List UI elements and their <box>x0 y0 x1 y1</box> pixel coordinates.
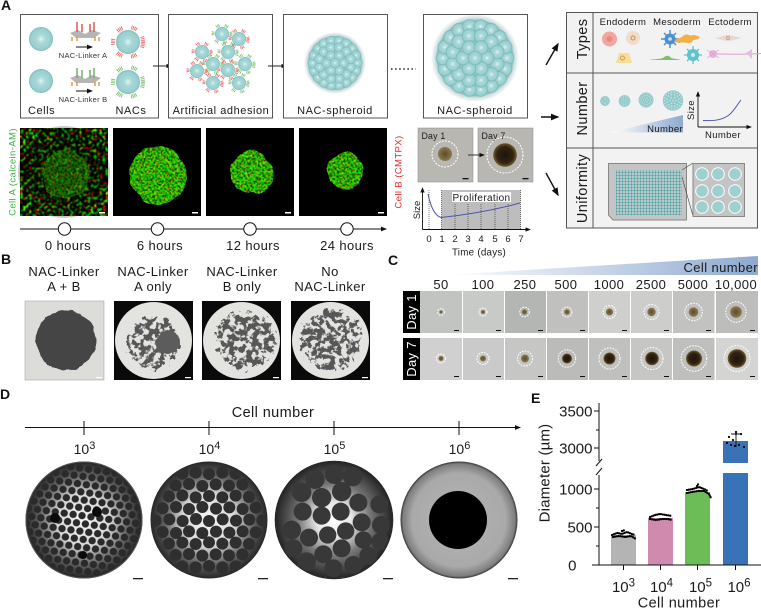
bars <box>611 441 748 565</box>
spheroid <box>304 32 366 94</box>
condition labels: NAC-Linker <box>117 264 189 279</box>
proliferation chart: 2 <box>452 234 458 245</box>
axis labels: 4 <box>214 440 220 452</box>
x tick labels: 10 <box>689 579 706 596</box>
arrow B <box>76 90 92 92</box>
NAC green <box>113 67 143 97</box>
icons mesoderm <box>649 30 702 64</box>
growing spheroids <box>600 90 683 111</box>
proliferation chart: 0 <box>426 234 432 245</box>
condition labels: A + B <box>47 279 81 294</box>
condition labels: NAC-Linker <box>294 279 366 294</box>
image B only <box>202 301 281 380</box>
fluorescence 24 hours <box>299 128 387 216</box>
box: artificial adhesion <box>168 14 272 118</box>
label NAC-Linker B: NAC-Linker B <box>59 95 107 104</box>
fluorescence 6 hours <box>113 128 201 216</box>
proliferation chart: Proliferation <box>453 193 510 204</box>
row tag Day 7: Day 7 <box>404 341 419 377</box>
axis labels: 10 <box>324 441 339 457</box>
column labels: 2500 <box>636 277 666 292</box>
y tick labels: 1000 <box>559 482 592 498</box>
column labels: 250 <box>514 277 536 292</box>
cell bottom <box>29 69 53 93</box>
column labels: 10,000 <box>715 277 757 292</box>
micrograph day 1: Day 1 <box>422 131 445 141</box>
headings germ layers <box>600 17 752 28</box>
fluorescence 12 hours <box>206 128 294 216</box>
label Cell B: Cell B (CMTPX) <box>394 135 404 209</box>
proliferation chart: 4 <box>478 234 484 245</box>
proliferation chart <box>412 188 530 258</box>
scale bar <box>258 578 268 579</box>
NAC-Linker B <box>70 68 101 86</box>
row label Number: Number <box>575 82 591 135</box>
arrow to Number <box>541 116 558 118</box>
fluorescence 0 hours <box>18 126 110 218</box>
column labels: 50 <box>433 277 449 292</box>
box: NAC-spheroid large <box>424 14 528 118</box>
arrow A <box>76 46 92 48</box>
scale bar <box>508 578 518 579</box>
y tick labels <box>559 404 592 574</box>
image no linker <box>291 301 370 380</box>
proliferation chart: 3 <box>465 234 471 245</box>
column labels: 100 <box>472 277 494 292</box>
micrograph grid <box>420 291 758 380</box>
x tick labels: 6 <box>744 578 751 590</box>
well 10^3 <box>25 461 143 579</box>
axis labels: 3 <box>89 440 95 452</box>
headings germ layers: Mesoderm <box>653 17 701 28</box>
label Cell A: Cell A (calcein-AM) <box>8 128 18 216</box>
data points <box>612 483 711 539</box>
cell number axis <box>25 421 520 435</box>
arrow to Types <box>546 44 558 65</box>
proliferation chart: Time (days) <box>452 248 506 258</box>
dots between spheroids <box>391 68 416 70</box>
number wedge <box>610 115 683 132</box>
arrow to spheroid <box>268 65 286 67</box>
axis labels: 6 <box>464 440 470 452</box>
axis labels <box>74 440 470 457</box>
proliferation chart: Size <box>412 201 423 219</box>
y tick labels: 3000 <box>559 440 592 458</box>
panel label E: E <box>531 390 540 406</box>
axes <box>592 403 761 565</box>
column labels: 5000 <box>678 277 708 292</box>
label artificial adhesion: Artificial adhesion <box>173 105 269 117</box>
panel label C: C <box>388 252 398 268</box>
label Number on wedge: Number <box>647 124 683 135</box>
magnified wells <box>693 164 744 216</box>
label NACs: NACs <box>116 105 146 117</box>
y axis title: Diameter (µm) <box>536 424 554 522</box>
cell top <box>29 27 53 51</box>
well 10^5 <box>275 461 393 579</box>
micrograph day 1 <box>418 128 473 182</box>
label: NAC-spheroid <box>297 105 373 117</box>
axis labels: 10 <box>449 441 464 457</box>
proliferation chart: 1 <box>439 234 445 245</box>
row tag Day 1: Day 1 <box>404 294 419 330</box>
NAC red <box>113 27 143 57</box>
micrograph day 7 <box>478 128 533 182</box>
row label Types: Types <box>575 19 591 59</box>
outcome table <box>566 12 761 228</box>
x tick labels: 10 <box>650 579 667 596</box>
well 10^4 <box>150 462 268 578</box>
y tick labels: 3500 <box>559 404 592 420</box>
axis break <box>596 459 602 475</box>
size vs number chart: Size <box>686 100 697 120</box>
arrow day 1 to day 7 <box>468 154 484 156</box>
spheroid <box>431 14 519 102</box>
size vs number chart <box>686 92 751 141</box>
column labels: 1000 <box>594 277 624 292</box>
y tick labels: 0 <box>568 558 576 574</box>
box: cells and NACs <box>20 14 158 118</box>
headings germ layers: Ectoderm <box>708 17 752 28</box>
NAC-Linker A <box>70 22 101 41</box>
icons ectoderm <box>707 35 761 59</box>
condition labels: NAC-Linker <box>206 264 278 279</box>
linked cells <box>188 25 254 92</box>
label: NAC-spheroid <box>437 105 513 117</box>
icons endoderm <box>602 31 640 63</box>
image A + B <box>25 301 104 380</box>
label NAC-Linker A: NAC-Linker A <box>59 51 107 60</box>
y tick labels: 500 <box>567 520 592 536</box>
time labels: 24 hours <box>320 238 374 253</box>
axis labels: 10 <box>74 441 89 457</box>
x ticks <box>624 565 736 570</box>
error bar <box>731 434 741 447</box>
proliferation chart: 7 <box>518 234 524 245</box>
condition labels: A only <box>134 279 172 294</box>
size vs number chart: Number <box>705 130 741 141</box>
arrow to adhesion <box>153 65 171 67</box>
x tick labels <box>612 578 751 596</box>
time labels: 12 hours <box>226 238 280 253</box>
arrow to Uniformity <box>546 173 558 195</box>
x tick labels: 4 <box>667 578 674 590</box>
proliferation chart: 5 <box>492 234 498 245</box>
headings germ layers: Endoderm <box>600 17 646 28</box>
proliferation chart: 6 <box>505 234 511 245</box>
x tick labels: 3 <box>629 578 635 590</box>
condition labels <box>28 264 366 294</box>
bar chart <box>536 403 761 609</box>
scale bar <box>383 578 393 579</box>
time labels: 0 hours <box>45 238 91 253</box>
condition labels: No <box>321 264 339 279</box>
axis labels: 5 <box>339 440 345 452</box>
label Cells: Cells <box>28 105 55 117</box>
condition labels: NAC-Linker <box>28 264 100 279</box>
condition labels: B only <box>223 279 261 294</box>
x tick labels: 5 <box>706 578 712 590</box>
scale bar <box>133 578 143 579</box>
column labels: 500 <box>555 277 577 292</box>
time axis <box>20 223 386 235</box>
well 10^6 <box>400 462 518 578</box>
label cell number: Cell number <box>684 260 758 275</box>
zoom lines <box>682 163 693 216</box>
panel label D: D <box>0 386 10 402</box>
x tick labels: 10 <box>612 579 629 596</box>
row label Uniformity: Uniformity <box>575 154 591 223</box>
data points 10^6 <box>726 431 745 448</box>
column labels <box>433 277 757 292</box>
panel label B: B <box>1 251 11 267</box>
x tick labels: 10 <box>727 579 744 596</box>
time labels <box>45 238 374 253</box>
time labels: 6 hours <box>137 238 183 253</box>
cell number wedge <box>445 256 758 275</box>
axis labels: 10 <box>199 441 214 457</box>
image A only <box>114 301 193 380</box>
box: NAC-spheroid small <box>284 14 388 118</box>
label cell number: Cell number <box>232 405 314 421</box>
micrograph day 7: Day 7 <box>482 131 505 141</box>
well plate <box>608 164 686 220</box>
